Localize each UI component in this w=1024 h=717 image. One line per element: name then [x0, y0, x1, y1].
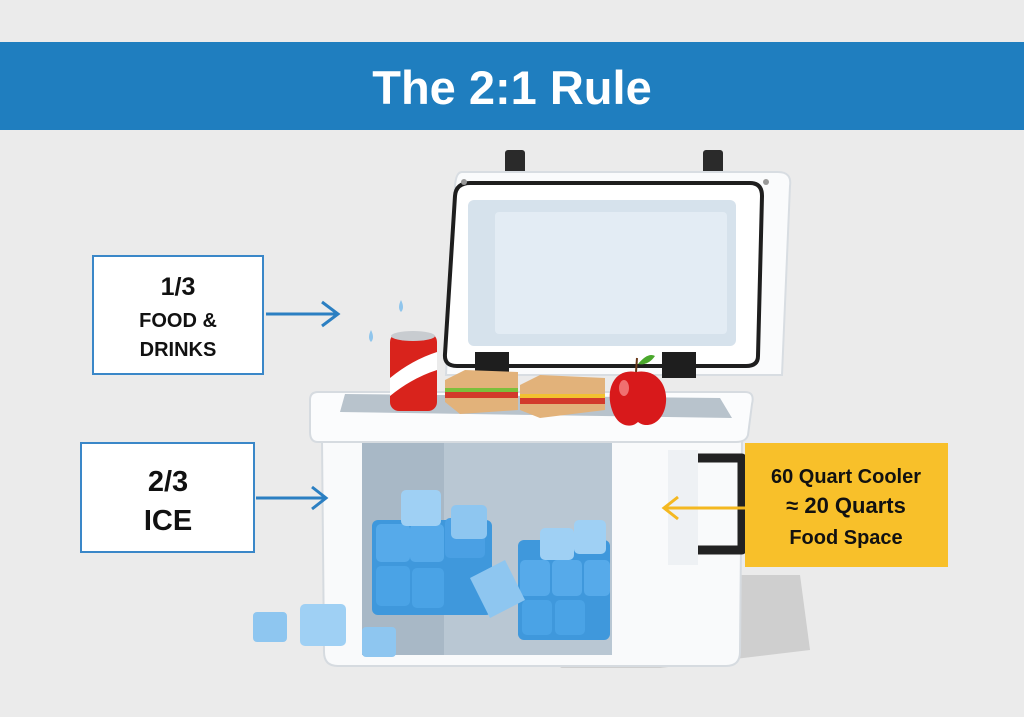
sandwich 1: [445, 370, 518, 414]
ice cubes in cooler: [372, 490, 610, 640]
cooler shadow: [560, 575, 810, 668]
title banner: The 2:1 Rule: [372, 61, 652, 114]
soda can: [390, 333, 437, 411]
cooler lid: [445, 150, 790, 378]
arrow 1: [266, 302, 338, 326]
label: 1/3 food & drinks: FOOD &: [139, 310, 217, 332]
callout: capacity: [745, 443, 948, 567]
apple: [610, 371, 666, 426]
food items: [369, 300, 666, 426]
title banner: [0, 42, 1024, 130]
water drops: [399, 300, 403, 312]
arrow 2: [256, 487, 326, 509]
arrow 3: [664, 497, 745, 519]
cooler rim: [310, 392, 753, 442]
callout: capacity: ≈ 20 Quarts: [786, 493, 906, 518]
label: 1/3 food & drinks: DRINKS: [140, 339, 216, 361]
label: 1/3 food & drinks: 1/3: [161, 273, 195, 301]
callout: capacity: 60 Quart Cooler: [771, 466, 921, 488]
label: 2/3 ice: 2/3: [148, 466, 188, 498]
sandwich 2: [520, 375, 605, 418]
callout: capacity: Food Space: [789, 527, 903, 549]
label: 2/3 ice: [81, 443, 254, 552]
loose ice cubes: [253, 604, 396, 657]
cooler body: [322, 440, 742, 666]
label: 2/3 ice: ICE: [144, 505, 192, 537]
label: 1/3 food & drinks: [93, 256, 263, 374]
